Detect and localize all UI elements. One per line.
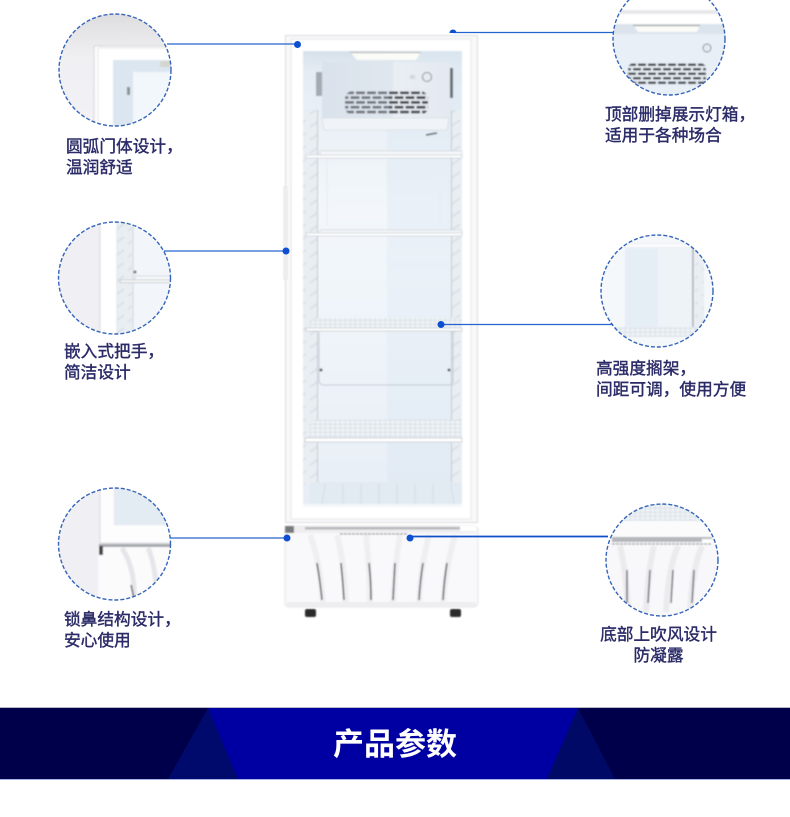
- banner background: [0, 708, 790, 779]
- caption: 顶部删掉展示灯箱，: [605, 105, 755, 124]
- right facets: [546, 708, 615, 779]
- anchor dot: [282, 248, 290, 254]
- caption: 圆弧门体设计，: [66, 137, 183, 156]
- detail circle: door corner: [55, 10, 175, 130]
- callout: lock catch: [55, 485, 290, 650]
- wire shelves: [305, 151, 462, 442]
- caption: 温润舒适: [66, 158, 133, 177]
- left facets: [168, 708, 240, 779]
- caption: 底部上吹风设计: [600, 625, 717, 644]
- callout: top light box removed: [450, 0, 755, 145]
- detail circle: fan cover: [610, 0, 730, 100]
- banner lower edge: [0, 778, 790, 780]
- caption: 安心使用: [64, 631, 131, 650]
- fan cover with vent grille: [316, 62, 453, 135]
- callout: recessed handle: [55, 220, 290, 382]
- caption: 简洁设计: [64, 363, 131, 382]
- fridge feet: [305, 609, 461, 617]
- detail circle: lock catch: [55, 485, 175, 605]
- anchor dot: [406, 534, 414, 542]
- anchor dot: [438, 321, 444, 328]
- connector line: [167, 43, 297, 45]
- caption: 间距可调，使用方便: [596, 380, 746, 399]
- connector line: [164, 250, 286, 252]
- anchor dot: [284, 534, 290, 542]
- caption: 锁鼻结构设计，: [64, 610, 181, 629]
- fridge interior: [303, 51, 462, 507]
- callout: bottom air blow: [406, 500, 723, 665]
- connector line: [170, 537, 287, 539]
- section banner: [0, 708, 790, 780]
- caption: 嵌入式把手，: [64, 342, 164, 361]
- detail circle: base vents: [603, 500, 723, 620]
- centre panel: [208, 708, 578, 779]
- connector line: [441, 324, 613, 326]
- connector line: [453, 32, 613, 34]
- caption: 防凝露: [633, 646, 684, 665]
- base with air vents: [285, 526, 478, 607]
- detail circle: shelf area: [598, 232, 718, 350]
- banner title: 产品参数: [333, 727, 457, 762]
- fridge door frame: [284, 36, 478, 522]
- refrigerator: [284, 36, 478, 617]
- banner edge lines: [0, 706, 790, 708]
- caption: 高强度搁架，: [596, 359, 696, 378]
- callout: strong shelves: [438, 232, 746, 399]
- callout: curved door: [55, 10, 301, 177]
- connector line: [410, 536, 608, 538]
- top light strip: [350, 52, 421, 60]
- caption: 适用于各种场合: [605, 126, 722, 145]
- anchor dot: [294, 41, 301, 48]
- anchor dot: [450, 30, 456, 33]
- detail circle: handle: [58, 221, 172, 335]
